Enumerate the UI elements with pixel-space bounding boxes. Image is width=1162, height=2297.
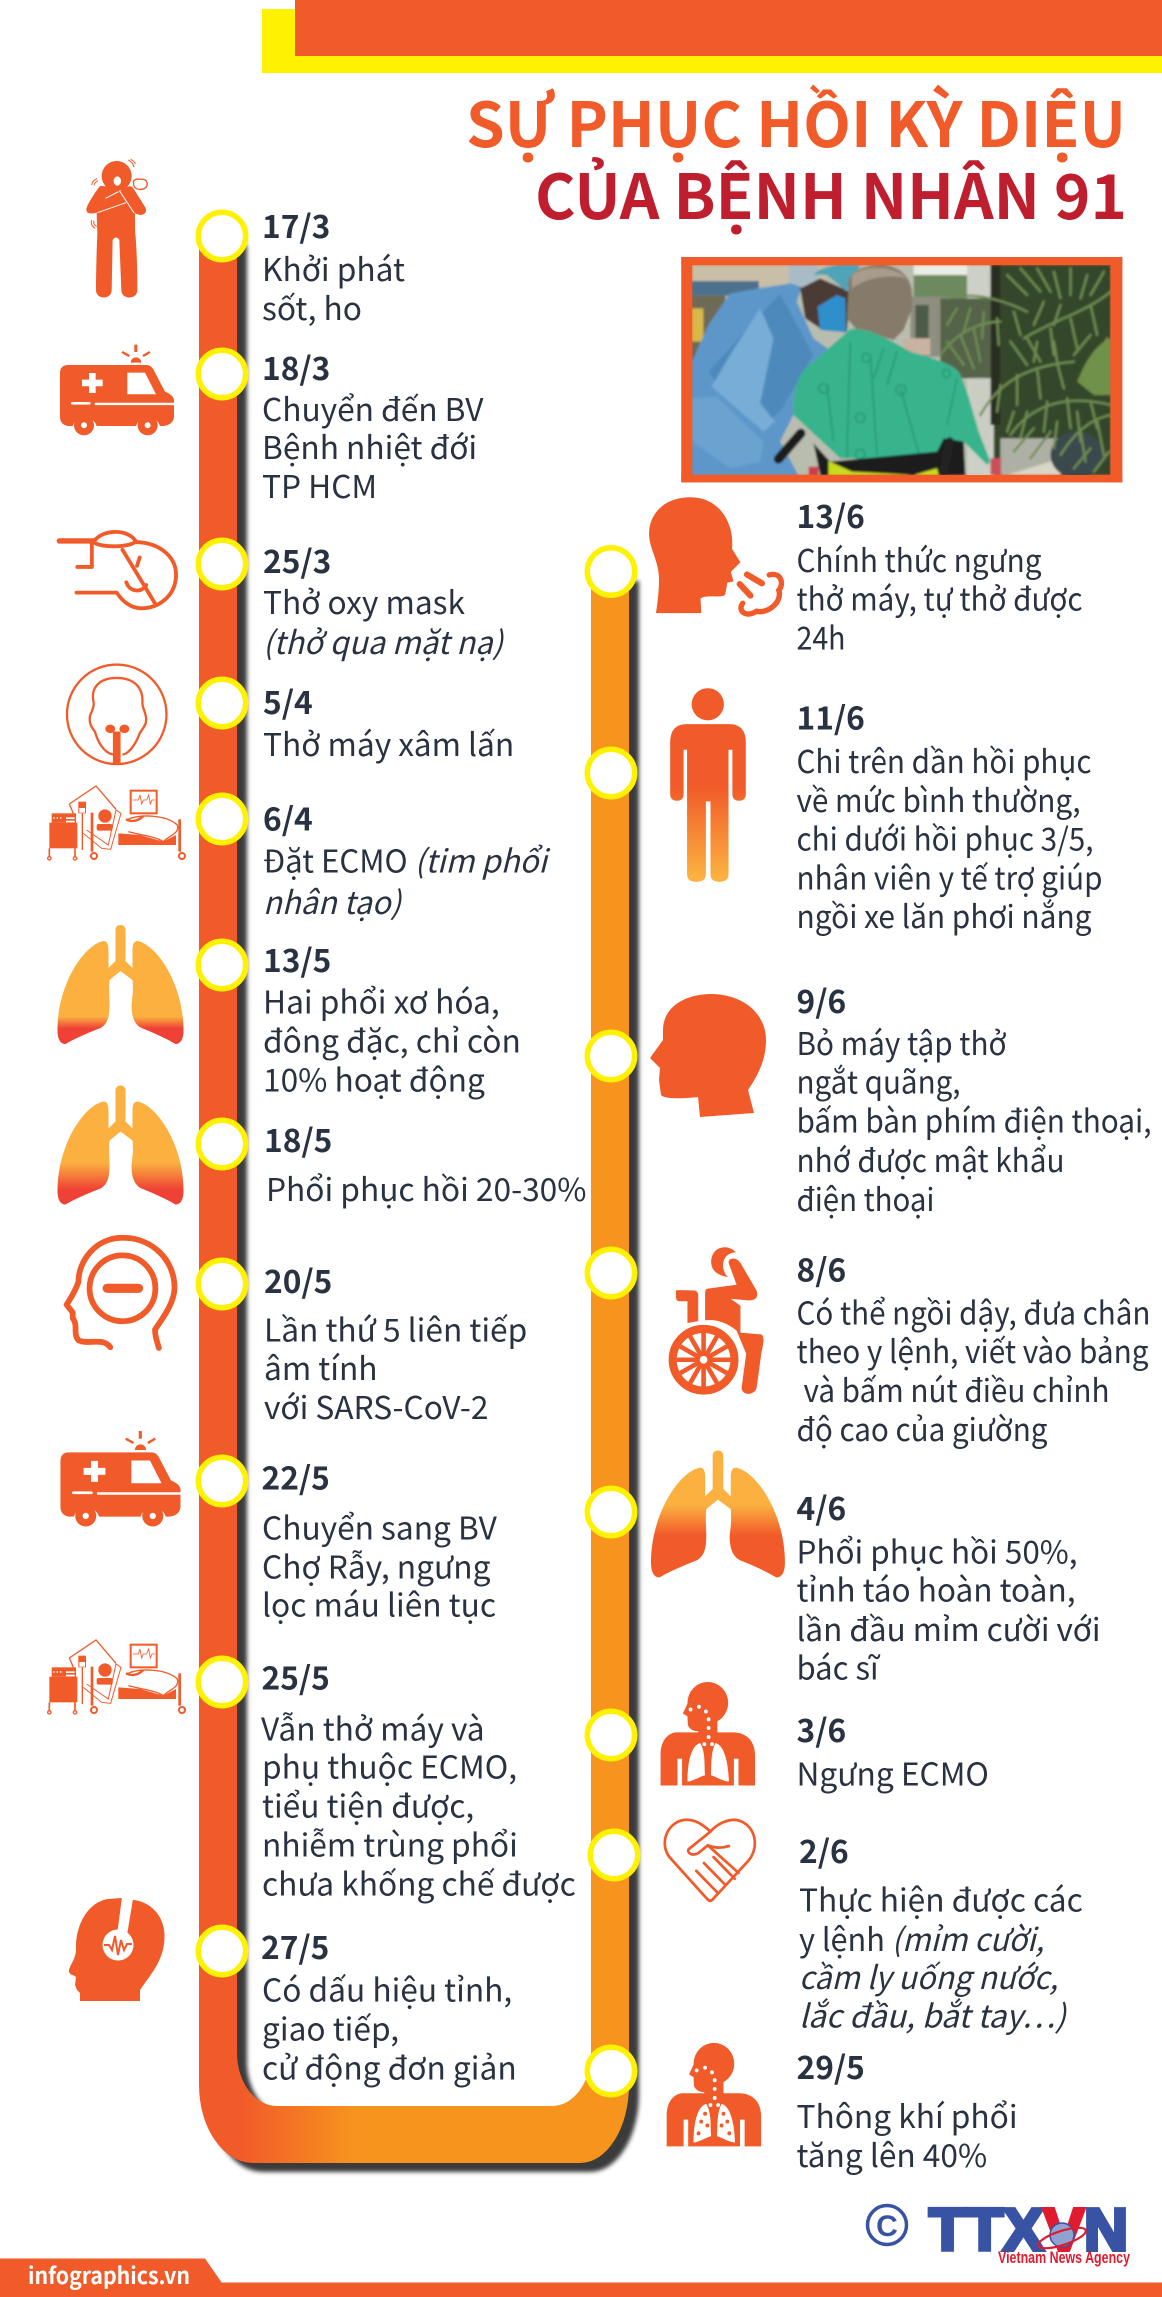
timeline pipe [199,236,629,2163]
entry 18/3 [262,344,484,508]
timeline circles [198,212,638,2095]
entry 2/6: Thực hiện được các [799,1876,1083,1922]
entry 22/5: 22/5 [262,1454,330,1500]
entry 13/6: thở máy, tự thở được [796,574,1082,620]
top banner [262,0,1162,73]
title [466,75,1127,237]
entry 2/6 [799,1827,1083,2038]
icon: coughing person [86,159,147,297]
entry 22/5 [262,1454,498,1626]
entry 5/4 [263,678,514,766]
footer bar: infographics.vn [28,2257,190,2291]
entry 13/6 [796,492,1082,660]
entry 3/6 [796,1706,989,1796]
entry 17/3: sốt, ho [262,284,362,330]
entry 13/5: 13/5 [263,936,331,982]
entry 29/5 [796,2043,1018,2177]
icon: lungs 10 percent [58,925,184,1044]
entry 18/5: 18/5 [264,1116,332,1162]
entry 25/5: 25/5 [262,1654,330,1700]
entry 29/5: tăng lên 40% [796,2131,987,2177]
entry 6/4: 6/4 [263,794,313,840]
entry 13/6: 13/6 [796,492,865,538]
entry 13/5 [263,936,521,1102]
icon: head with negative sign [67,1238,175,1348]
entry 2/6: lắc đầu, bắt tay…) [799,1992,1067,2038]
icon: lungs 50 percent [651,1450,785,1577]
entry 11/6: nhân viên y tế trợ giúp [796,854,1102,900]
entry 9/6: điện thoại [796,1175,934,1221]
icon: ambulance [60,345,174,435]
entry 18/3: Bệnh nhiệt đới [262,423,477,469]
entry 25/5: Vẫn thở máy và [261,1704,485,1750]
entry 18/5: Phổi phục hồi 20-30% [266,1165,586,1211]
entry 18/5 [264,1116,586,1211]
entry 4/6: Phổi phục hồi 50%, [796,1528,1078,1574]
icon: standing person [670,688,746,882]
entry 9/6 [796,977,1152,1221]
entry 4/6: lần đầu mỉm cười với [796,1605,1100,1651]
entry 4/6: bác sĩ [796,1644,881,1690]
entry 13/5: Hai phổi xơ hóa, [263,978,500,1024]
footer bar [0,2257,1162,2297]
entry 18/3: TP HCM [262,462,377,508]
icon: head in profile [650,994,766,1117]
entry 9/6: 9/6 [796,977,846,1023]
entry 11/6 [796,694,1102,938]
entry 3/6: Ngưng ECMO [796,1750,989,1796]
entry 17/3: 17/3 [262,202,330,248]
entry 27/5: giao tiếp, [262,2004,399,2050]
entry 11/6: chi dưới hồi phục 3/5, [796,814,1094,860]
entry 27/5: Có dấu hiệu tỉnh, [262,1966,512,2012]
icon: handshake heart [665,1820,755,1901]
icon: torso with airway [661,1682,755,1785]
entry 25/3: 25/3 [263,537,331,583]
entry 9/6: nhớ được mật khẩu [796,1136,1064,1182]
entry 29/5: Thông khí phổi [796,2092,1018,2138]
entry 25/5: phụ thuộc ECMO, [262,1742,517,1788]
icon: oxygen mask [59,532,176,608]
entry 11/6: ngồi xe lăn phơi nắng [796,892,1092,938]
icon: ambulance transfer [60,1431,181,1526]
entry 27/5: cử động đơn giản [262,2044,517,2090]
title: SỰ PHỤC HỒI KỲ DIỆU [466,75,1126,165]
photo: patient in wheelchair with medical staff [681,257,1122,482]
entry 29/5: 29/5 [796,2043,865,2089]
entry 27/5: 27/5 [261,1923,329,1969]
entry 17/3 [262,202,405,330]
entry 20/5: Lần thứ 5 liên tiếp [264,1306,527,1352]
entry 2/6: y lệnh (mỉm cười, [799,1915,1044,1961]
entry 3/6: 3/6 [796,1706,846,1752]
entry 5/4: Thở máy xâm lấn [263,720,514,766]
copyright mark [868,2206,906,2244]
icon: lungs 20-30 percent [58,1086,184,1204]
entry 22/5: lọc máu liên tục [262,1580,496,1626]
entry 22/5: Chuyển sang BV [262,1504,498,1550]
entry 11/6: về mức bình thường, [796,776,1080,822]
logo: TTXVN: TTXVN [929,2197,1128,2263]
entry 18/3: Chuyển đến BV [262,385,484,431]
entry 20/5: với SARS-CoV-2 [264,1383,488,1429]
icon: head with brain wave [69,1897,165,2001]
entry 8/6 [796,1246,1150,1451]
entry 11/6: Chi trên dần hồi phục [796,737,1092,783]
entry 25/3: (thở qua mặt nạ) [263,618,504,664]
icon: invasive ventilation head [67,665,166,764]
icon: ECMO bed [48,786,185,860]
title: CỦA BỆNH NHÂN 91 [535,147,1127,237]
entry 20/5: âm tính [264,1344,378,1390]
entry 8/6: và bấm nút điều chỉnh [804,1366,1110,1412]
entry 13/5: 10% hoạt động [263,1056,485,1102]
entry 25/3 [263,537,504,664]
entry 27/5 [261,1923,517,2090]
entry 18/3: 18/3 [262,344,330,390]
entry 20/5: 20/5 [264,1257,332,1303]
entry 8/6: theo y lệnh, viết vào bảng [796,1327,1149,1373]
entry 9/6: Bỏ máy tập thở [796,1019,1006,1065]
entry 25/5: nhiễm trùng phổi [262,1820,518,1866]
entry 20/5 [264,1257,527,1429]
entry 13/6: 24h [796,614,846,660]
entry 6/4: nhân tạo) [263,878,402,924]
entry 8/6: độ cao của giường [796,1405,1048,1451]
icon: ECMO bed second [48,1640,185,1714]
entry 25/5: chưa khống chế được [262,1860,576,1906]
entry 25/5 [261,1654,576,1906]
icon: wheelchair [668,1247,763,1395]
entry 8/6: 8/6 [796,1246,846,1292]
entry 4/6: 4/6 [796,1484,846,1530]
entry 22/5: Chợ Rẫy, ngưng [262,1542,491,1588]
entry 11/6: 11/6 [796,694,865,740]
entry 4/6: tỉnh táo hoàn toàn, [796,1566,1076,1612]
entry 6/4: Đặt ECMO (tim phổi [263,836,551,882]
timeline pipe shadow [209,245,639,2172]
entry 2/6: 2/6 [799,1827,849,1873]
entry 25/5: tiểu tiện được, [262,1782,474,1828]
entry 17/3: Khởi phát [262,245,405,291]
entry 13/5: đông đặc, chỉ còn [263,1016,521,1062]
entry 4/6 [796,1484,1100,1690]
entry 6/4 [263,794,551,924]
entry 5/4: 5/4 [263,678,313,724]
entry 13/6: Chính thức ngưng [796,536,1042,582]
icon: torso with lung ventilation [667,2043,761,2146]
entry 9/6: ngắt quãng, [796,1058,960,1104]
entry 2/6: cầm ly uống nước, [799,1953,1058,1999]
copyright mark: C [876,2210,898,2243]
entry 25/3: Thở oxy mask [263,578,466,624]
icon: breathing head [649,497,781,614]
